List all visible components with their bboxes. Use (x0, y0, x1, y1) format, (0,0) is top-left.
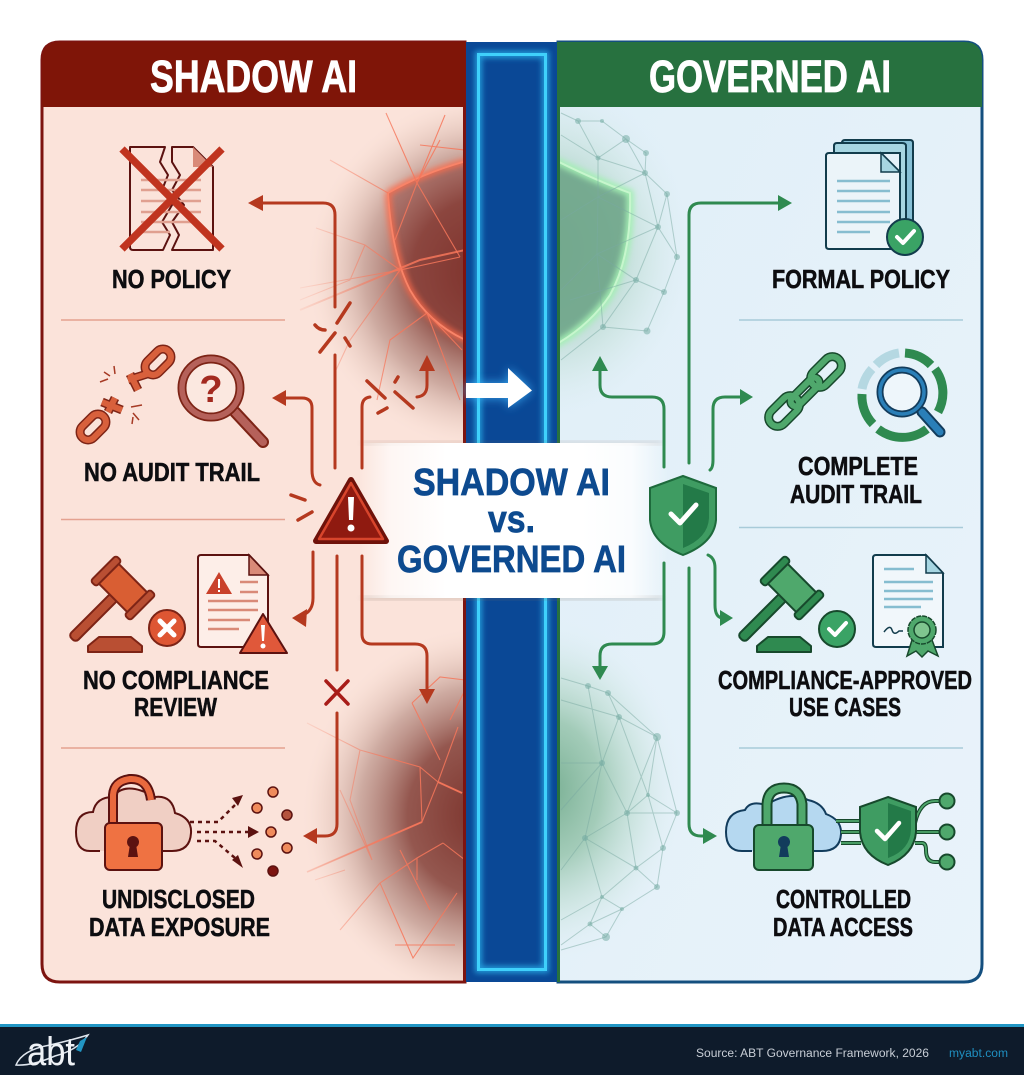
footer website: myabt.com (949, 1048, 1008, 1060)
shield badge (650, 476, 716, 555)
header: governed AI (558, 42, 982, 107)
header: shadow AI: SHADOW AI (150, 51, 357, 102)
center title box (360, 441, 668, 600)
header: shadow AI (42, 42, 465, 107)
footer logo: abt (27, 1030, 75, 1074)
heading: undisclosed data exposure (89, 884, 270, 942)
heading: no compliance review (83, 665, 269, 722)
heading: compliance-approved use cases (718, 665, 972, 722)
icon: gavel, check and certificate (721, 555, 943, 659)
panel: governed AI (556, 40, 984, 984)
heading: controlled data access: DATA ACCESS (773, 912, 913, 942)
icon: gavel, cross and warning document (52, 555, 287, 659)
heading: no audit trail: NO AUDIT TRAIL (84, 457, 260, 487)
header: governed AI: GOVERNED AI (649, 51, 891, 102)
heading: complete audit trail (790, 451, 922, 509)
footer source text: Source: ABT Governance Framework, 2026 (696, 1048, 929, 1060)
heading: controlled data access: CONTROLLED (776, 884, 911, 914)
dividers (61, 320, 963, 748)
center title box: GOVERNED AI (397, 539, 626, 581)
center band with neon frame (463, 42, 560, 982)
heading: compliance-approved use cases: USE CASES (789, 692, 901, 722)
warning triangle (316, 480, 386, 541)
center title box: vs. (488, 499, 535, 541)
icon: broken chain and question magnifier: ? (199, 369, 223, 411)
heading: controlled data access (773, 884, 913, 942)
heading: no compliance review: NO COMPLIANCE (83, 665, 269, 695)
arrow: shadow to governed (466, 368, 532, 408)
icon: secured cloud, lock, shield and nodes (726, 788, 954, 870)
heading: formal policy: FORMAL POLICY (772, 264, 950, 294)
connectors: governed AI (592, 195, 792, 844)
heading: undisclosed data exposure: UNDISCLOSED (102, 884, 255, 914)
icon: formal policy documents (826, 140, 923, 255)
heading: no policy: NO POLICY (112, 264, 231, 294)
center title box: SHADOW AI (413, 462, 610, 504)
heading: complete audit trail: COMPLETE (798, 451, 918, 481)
heading: complete audit trail: AUDIT TRAIL (790, 479, 922, 509)
panel: shadow AI (40, 40, 466, 984)
heading: undisclosed data exposure: DATA EXPOSURE (89, 912, 270, 942)
icon: open lock cloud and scattered data (76, 779, 292, 876)
connectors: shadow AI (248, 195, 435, 844)
heading: no compliance review: REVIEW (134, 692, 217, 722)
icon: torn policy document (122, 147, 222, 250)
footer bar (0, 1024, 1024, 1075)
icon: broken chain and question magnifier (77, 346, 263, 443)
icon: complete chain and ring magnifier (765, 353, 943, 437)
